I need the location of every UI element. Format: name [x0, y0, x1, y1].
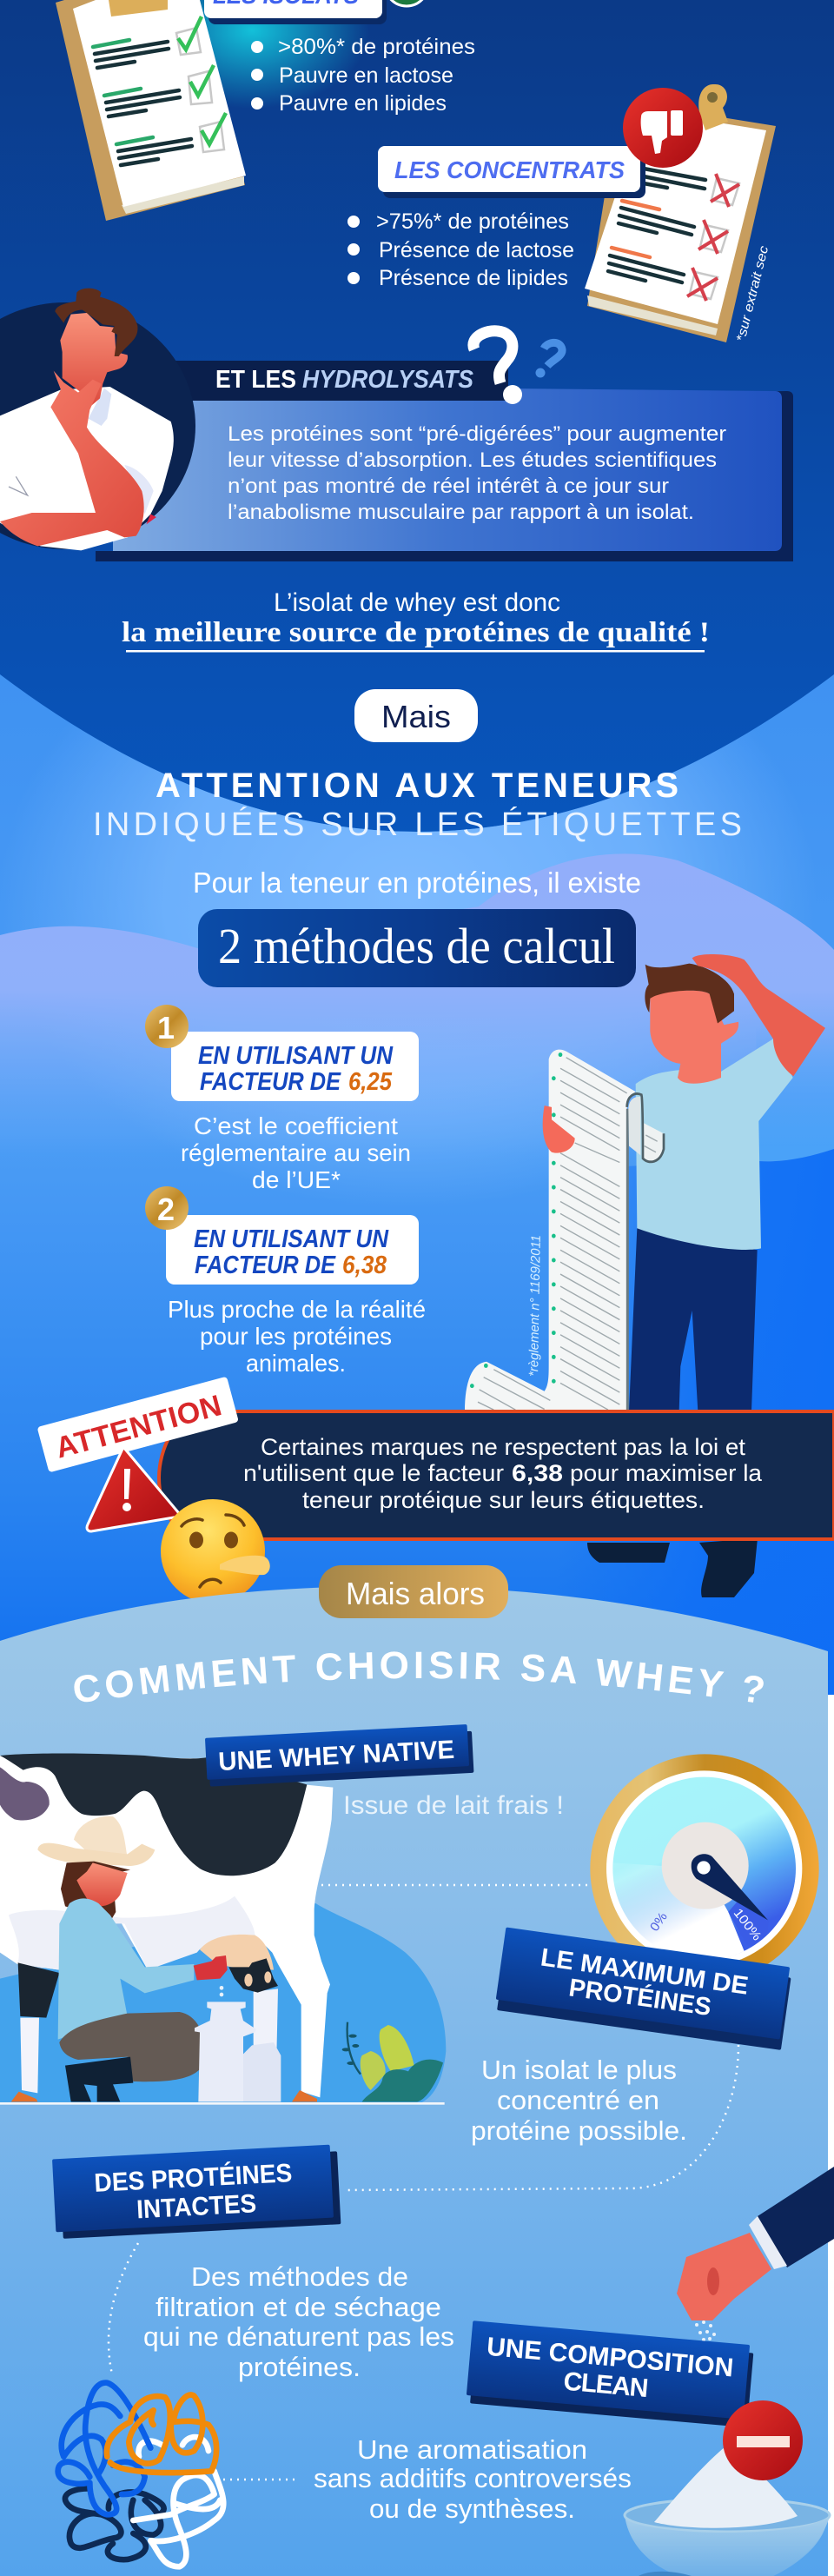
page background [0, 0, 834, 1695]
method 1: EN UTILISANT UN [198, 1042, 394, 1070]
text: aromatisation [314, 2434, 632, 2524]
text: methodes de filtration: Des méthodes de [191, 2261, 408, 2292]
label: une composition clean: CLEAN [562, 2367, 650, 2403]
method 2: pour les protéines [200, 1323, 392, 1350]
icon: no entry sign [723, 2400, 803, 2480]
label: une whey native [205, 1724, 473, 1787]
text: teneur: Pour la teneur en protéines, il existe [193, 866, 641, 899]
label: le maximum de proteines: PROTÉINES [567, 1972, 713, 2022]
sign: attention [37, 1377, 239, 1531]
icon: powder bowl [625, 2444, 830, 2576]
text: methodes de filtration: protéines. [238, 2352, 361, 2382]
text: conclusion isolat [122, 588, 710, 652]
label: les concentrats: LES CONCENTRATS [394, 156, 625, 183]
list: isolats: Pauvre en lipides [279, 91, 447, 116]
icon: gauge: 100% [731, 1907, 764, 1943]
panel: hydrolysats: leur vitesse d’absorption. Les études scientifiques [228, 448, 717, 472]
text: isolat le plus concentre: protéine possible. [471, 2115, 687, 2146]
connector: dotted native to gauge [321, 1884, 587, 1886]
text: conclusion isolat: la meilleure source de protéines de qualité ! [122, 617, 710, 648]
list: concentrats: >75%* de protéines [376, 209, 569, 234]
connector: dotted molecule to text [223, 2479, 295, 2480]
label: des proteines intactes: DES PROTÉINES [94, 2158, 293, 2198]
text: aromatisation: sans additifs controversés [314, 2463, 632, 2493]
panel: hydrolysats: n’ont pas montré de réel intérêt à ce jour sur [228, 475, 669, 498]
label: le maximum de proteines [494, 1927, 792, 2050]
label: une composition clean [466, 2320, 754, 2427]
text: isolat le plus concentre [471, 2055, 687, 2146]
method 1 [145, 1005, 419, 1193]
list: isolats [251, 35, 475, 116]
method 2: Plus proche de la réalité [168, 1296, 426, 1323]
panel: hydrolysats [96, 361, 793, 561]
illustration: cow and farmer [0, 1753, 446, 2105]
text: methodes de filtration: filtration et de séchage [156, 2292, 441, 2322]
method 2: 6,38 [342, 1251, 387, 1279]
method 2: animales. [246, 1350, 346, 1377]
label: une whey native: UNE WHEY NATIVE [218, 1736, 455, 1776]
method 2: FACTEUR DE [195, 1251, 336, 1279]
clipboard: isolats [56, 0, 246, 221]
footnote: sur extrait sec: *sur extrait sec [733, 244, 771, 343]
label: des proteines intactes [52, 2144, 341, 2239]
method 1: 1 [157, 1010, 175, 1046]
pill: 2 methodes de calcul: 2 méthodes de calcul [218, 918, 615, 974]
label: une composition clean: UNE COMPOSITION [486, 2333, 735, 2382]
method 2 [145, 1186, 426, 1377]
icon: gauge: 0% [648, 1910, 671, 1935]
heading: comment choisir sa whey: COMMENT CHOISIR SA WHEY ? [74, 1651, 764, 1703]
callout: attention banner: pour maximiser la [570, 1460, 763, 1486]
pill: mais alors: Mais alors [346, 1576, 485, 1611]
pill: mais [354, 689, 478, 742]
panel: hydrolysats: ET LES [215, 366, 296, 394]
text: methodes de filtration: qui ne dénaturent pas les [143, 2321, 454, 2352]
list: isolats: >80%* de protéines [278, 35, 475, 59]
method 2: EN UTILISANT UN [194, 1225, 389, 1253]
icon: hand sprinkling [677, 2167, 834, 2341]
label: des proteines intactes: INTACTES [136, 2189, 257, 2224]
clipboard: concentrats [585, 84, 776, 342]
pill: mais alors [319, 1565, 508, 1618]
sign: attention: ATTENTION [52, 1389, 225, 1465]
callout: attention banner: n'utilisent que le facteur [243, 1460, 504, 1486]
illustration: man with document [465, 954, 825, 1597]
text: conclusion isolat: L’isolat de whey est donc [274, 588, 560, 617]
method 1: 6,25 [348, 1068, 393, 1096]
icon: lying face emoji [161, 1499, 270, 1603]
method 1: réglementaire au sein [181, 1139, 411, 1166]
list: isolats: Pauvre en lactose [279, 63, 453, 88]
callout: attention banner: Certaines marques ne respectent pas la loi et [261, 1434, 746, 1460]
text: isolat le plus concentre: Un isolat le plus [481, 2055, 677, 2085]
pill: 2 methodes de calcul [198, 909, 636, 987]
method 1: FACTEUR DE [200, 1068, 341, 1096]
icon: thumbs down [623, 88, 703, 168]
label: les concentrats [378, 146, 645, 198]
label: le maximum de proteines: LE MAXIMUM DE [539, 1944, 750, 2001]
panel: hydrolysats: HYDROLYSATS [302, 366, 474, 394]
label: les isolats [204, 0, 428, 24]
list: concentrats: Présence de lipides [379, 266, 568, 290]
panel: hydrolysats: l’anabolisme musculaire par rapport à un isolat. [228, 501, 694, 524]
icon: gauge [590, 1754, 819, 1983]
method 1: de l’UE* [252, 1166, 341, 1193]
heading: attention aux teneurs: INDIQUÉES SUR LES ÉTIQUETTES [93, 806, 742, 843]
text: methodes de filtration [143, 2261, 454, 2382]
text: aromatisation: ou de synthèses. [369, 2493, 575, 2524]
panel: hydrolysats: Les protéines sont “pré-digérées” pour augmenter [228, 422, 726, 446]
heading: attention aux teneurs [93, 767, 742, 843]
method 1: C’est le coefficient [194, 1112, 398, 1139]
method 2: 2 [157, 1192, 175, 1227]
heading: attention aux teneurs: ATTENTION AUX TENEURS [156, 767, 678, 805]
illustration: thinking person [0, 289, 195, 550]
list: concentrats [348, 209, 574, 290]
callout: attention banner [159, 1411, 834, 1539]
text: aromatisation: Une aromatisation [357, 2434, 587, 2465]
callout: attention banner: 6,38 [512, 1460, 563, 1486]
text: issue de lait frais: Issue de lait frais ! [343, 1791, 564, 1820]
footnote: reglement: *règlement n° 1169/2011 [526, 1235, 544, 1377]
text: isolat le plus concentre: concentré en [497, 2085, 659, 2115]
list: concentrats: Présence de lactose [379, 238, 574, 262]
section: comment choisir background [0, 1586, 828, 2576]
connector: dotted maximum to proteines [343, 2045, 738, 2190]
icon: protein molecule [58, 2383, 223, 2566]
connector: dotted intactes to molecule [109, 2243, 138, 2374]
icon: question marks [473, 331, 562, 404]
callout: attention banner: teneur protéique sur leurs étiquettes. [302, 1487, 705, 1513]
pill: mais: Mais [381, 699, 451, 734]
